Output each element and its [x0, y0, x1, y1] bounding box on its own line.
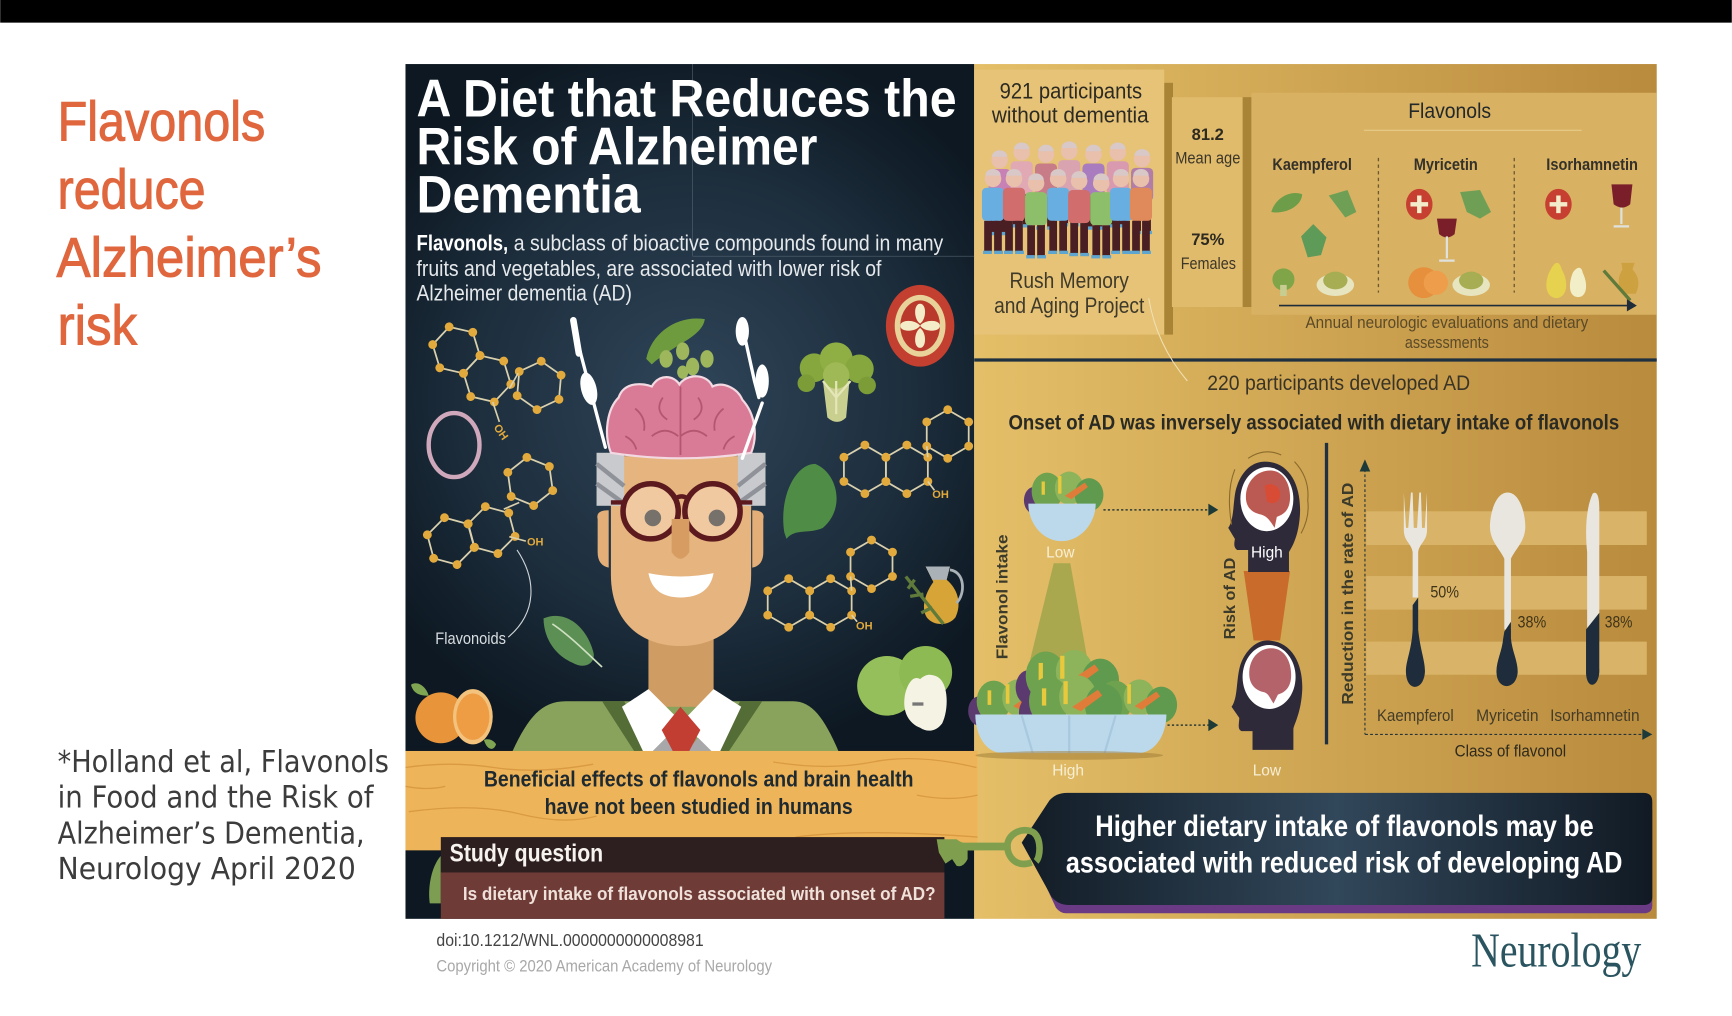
card: demographics: 81.2 — [1192, 125, 1224, 144]
icon: orange — [411, 683, 496, 749]
smile — [648, 573, 714, 597]
card: demographics — [1172, 97, 1251, 307]
illustration: small salad bowl — [1024, 472, 1103, 562]
card: participants: Rush Memory — [1010, 268, 1129, 293]
panel: study question — [441, 837, 944, 919]
ears — [597, 510, 764, 568]
knife — [1586, 493, 1599, 629]
icon: tomato — [886, 285, 954, 367]
neck — [648, 629, 714, 707]
bar chart: reduction in rate of AD: Myricetin — [1476, 706, 1539, 725]
icon: kale leaf — [544, 616, 602, 667]
icons: myricetin foods — [1406, 189, 1491, 298]
follow-up caption: assessments — [1405, 333, 1489, 352]
class labels: Kaempferol — [1377, 706, 1454, 725]
card: flavonols: Myricetin — [1414, 155, 1478, 174]
spoon — [1490, 493, 1525, 629]
axis label: reduction in rate of AD: Reduction in the rate of AD — [1340, 483, 1357, 705]
conclusion tag — [1022, 793, 1652, 913]
intro text: a subclass of bioactive compounds found in many — [514, 231, 943, 256]
percentages: 50% — [1430, 582, 1459, 601]
bar chart: reduction in rate of AD: Class of flavonol — [1455, 741, 1566, 760]
illustration: large salad bowl: High — [1052, 762, 1084, 779]
nose — [672, 519, 689, 559]
banner text: Beneficial effects of flavonols and brain health — [484, 766, 913, 791]
citation text — [58, 745, 389, 887]
fork — [1404, 493, 1427, 597]
illustration: low-risk head — [1232, 641, 1302, 779]
intro text — [417, 231, 943, 305]
card: flavonols: Flavonols — [1408, 100, 1491, 123]
banner text — [484, 766, 913, 819]
card: participants — [974, 70, 1173, 335]
slide heading: risk — [58, 295, 137, 357]
slide heading: Flavonols — [58, 90, 265, 152]
divider and connector — [974, 359, 1657, 362]
results text: Onset of AD was inversely associated with dietary intake of flavonols — [1008, 411, 1619, 435]
card: flavonols — [1251, 93, 1657, 315]
logo: Neurology: Neurology — [1471, 923, 1642, 977]
chart: flavonol intake beam — [1029, 563, 1088, 663]
face — [611, 456, 751, 646]
molecule: top left — [424, 315, 567, 443]
bar chart: reduction in rate of AD: 38% — [1605, 612, 1633, 631]
chart: risk beam — [1244, 571, 1290, 641]
follow-up caption: Annual neurologic evaluations and dietary — [1306, 313, 1589, 332]
banner: wood — [405, 751, 978, 850]
illustration: high-risk head — [1228, 452, 1308, 572]
conclusion tag: Higher dietary intake of flavonols may be — [1095, 810, 1594, 843]
citation text: *Holland et al, Flavonols — [58, 745, 389, 780]
slide heading — [57, 90, 322, 357]
source: copyright: Copyright © 2020 American Academy of Neurology — [436, 956, 773, 975]
axis label: flavonol intake: Flavonol intake — [994, 534, 1011, 659]
molecule: left middle — [419, 450, 559, 575]
bar chart: reduction in rate of AD: Isorhamnetin — [1550, 706, 1640, 725]
panel: dark background — [405, 64, 974, 919]
slide heading: reduce — [58, 158, 206, 220]
sweater v-neck — [602, 701, 762, 751]
icons: isorhamnetin foods — [1545, 184, 1638, 300]
illustration: large salad bowl — [968, 650, 1177, 779]
card: demographics: 75% — [1191, 230, 1225, 249]
illustration: high-risk head: High — [1251, 545, 1283, 562]
infographic title — [417, 70, 957, 225]
illustration: low-risk head: Low — [1253, 762, 1282, 779]
results text — [1008, 372, 1619, 435]
infographic title: Dementia — [417, 166, 641, 225]
card: demographics: Females — [1181, 254, 1236, 273]
molecule: right upper — [839, 405, 973, 501]
intro text: fruits and vegetables, are associated with lower risk of — [417, 256, 882, 281]
intro text: Alzheimer dementia (AD) — [417, 280, 632, 305]
molecule: right lower — [763, 536, 897, 632]
panel: study question: Is dietary intake of flavonols associated with onset of AD? — [463, 883, 936, 904]
infographic title: Risk of Alzheimer — [417, 118, 817, 177]
grey stripes — [597, 453, 624, 506]
arrows: intake to risk — [1103, 504, 1218, 731]
follow-up caption — [1306, 313, 1589, 352]
brain — [607, 376, 755, 458]
illustration: professor character — [513, 376, 838, 751]
citation text: Neurology April 2020 — [58, 852, 356, 887]
vertical separator — [1325, 443, 1328, 744]
arrow: follow-up timeline — [1279, 299, 1637, 311]
illustration: small salad bowl: Low — [1046, 545, 1075, 562]
molecule: right upper: OH — [932, 489, 949, 501]
card: participants: without dementia — [991, 103, 1149, 128]
icon: broccoli — [798, 342, 876, 422]
glasses — [623, 484, 678, 539]
icon: fork in head — [573, 320, 605, 447]
icon: olive oil jug — [906, 567, 963, 624]
bar chart: reduction in rate of AD — [1360, 459, 1652, 760]
slide heading: Alzheimer’s — [57, 227, 322, 289]
card: participants: and Aging Project — [994, 293, 1144, 318]
shoulders — [513, 701, 838, 751]
results text: 220 participants developed AD — [1207, 372, 1470, 395]
eyes — [645, 510, 661, 526]
icon: peas — [646, 318, 714, 379]
citation text: in Food and the Risk of — [58, 780, 375, 815]
infographic title: A Diet that Reduces the — [417, 70, 957, 129]
top black bar — [0, 0, 1732, 23]
collar — [622, 689, 741, 751]
card: flavonols: Kaempferol — [1272, 155, 1352, 174]
axis label: risk of AD: Risk of AD — [1222, 558, 1239, 639]
small leaf bottom left — [429, 856, 441, 903]
molecule: left middle: OH — [527, 537, 544, 549]
intro text: Flavonols, — [417, 231, 508, 256]
panel: gold background — [974, 64, 1657, 919]
icons: kaempferol foods — [1271, 190, 1356, 296]
card: participants: 921 participants — [1000, 78, 1142, 103]
icon: spoon in head — [736, 317, 769, 458]
axes — [1365, 469, 1643, 734]
citation text: Alzheimer’s Dementia, — [58, 817, 365, 852]
card: flavonols: Isorhamnetin — [1546, 155, 1638, 174]
card: demographics: Mean age — [1175, 148, 1240, 167]
bar chart: reduction in rate of AD: 38% — [1518, 612, 1547, 631]
icon: apple — [857, 646, 952, 731]
molecule: top left: OH — [491, 422, 510, 443]
bands — [1366, 511, 1647, 545]
panel: study question: Study question — [450, 839, 603, 867]
banner text: have not been studied in humans — [545, 794, 853, 819]
tie — [662, 707, 700, 751]
conclusion tag: associated with reduced risk of developing AD — [1066, 846, 1622, 879]
icon: ring — [429, 413, 479, 477]
molecule: right lower: OH — [856, 620, 873, 632]
flavonoids label and pointer — [435, 550, 531, 648]
flavonoids label and pointer: Flavonoids — [435, 629, 506, 648]
icon: pepper — [783, 464, 837, 539]
source: doi: doi:10.1212/WNL.0000000000008981 — [436, 930, 704, 950]
icon: green key — [937, 830, 1040, 866]
illustration: crowd — [982, 141, 1153, 258]
